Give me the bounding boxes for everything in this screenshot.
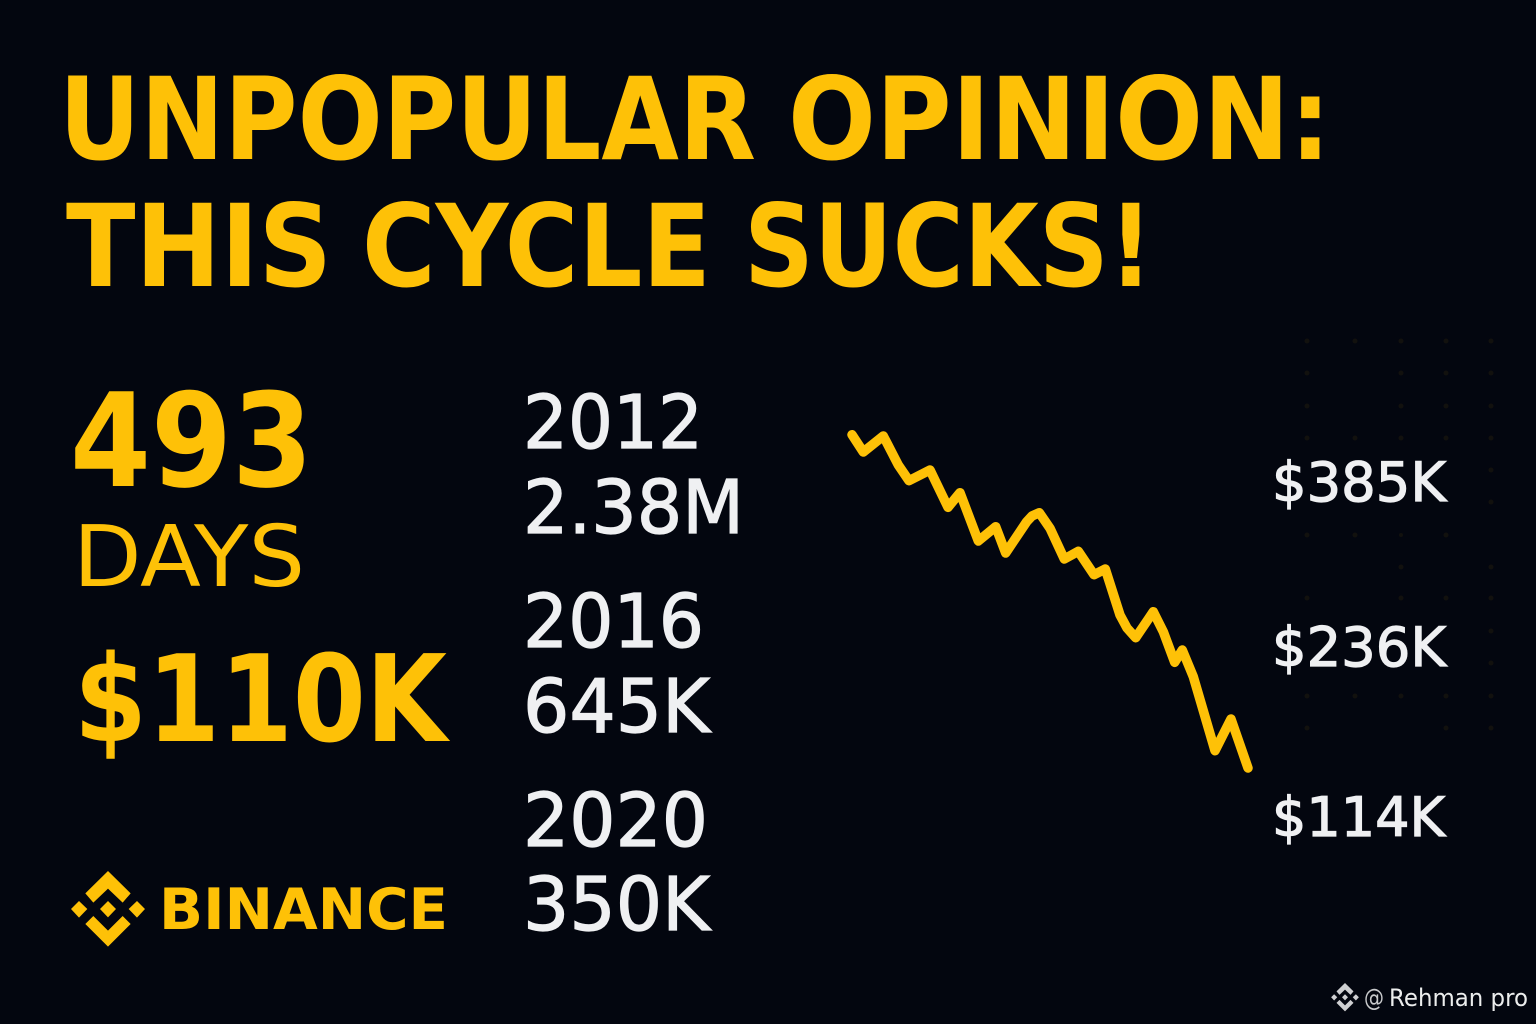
title: THIS xyxy=(66,180,332,313)
cycle list: 2012: 2.38M xyxy=(523,465,744,551)
title xyxy=(59,53,1331,313)
watermark: Rehman pro xyxy=(1389,984,1528,1012)
cycle list: 2016: 2016 xyxy=(523,579,704,665)
line chart: falling price xyxy=(852,435,1248,768)
cycle list: 2020 xyxy=(523,778,712,948)
watermark text: @ xyxy=(1364,984,1384,1012)
price label: $114K: $114K xyxy=(1272,786,1447,849)
title: OPINION: xyxy=(788,53,1331,186)
Binance logo xyxy=(71,871,448,947)
stat: $110K price: $110K xyxy=(74,631,450,770)
title: SUCKS! xyxy=(744,180,1153,313)
title: UNPOPULAR xyxy=(59,53,756,186)
Binance wordmark: BINANCE xyxy=(159,877,448,943)
title: CYCLE xyxy=(362,180,711,313)
icon: watermark diamond xyxy=(1331,983,1359,1011)
icon: Binance diamond xyxy=(71,871,145,947)
cycle list: 2012 xyxy=(523,380,744,551)
cycle list: 2016: 645K xyxy=(523,664,712,750)
watermark xyxy=(1331,983,1528,1012)
price label: $236K: $236K xyxy=(1272,616,1448,679)
price label: $385K: $385K xyxy=(1272,451,1448,514)
cycle list: 2012: 2012 xyxy=(523,380,703,466)
stat: 493 days xyxy=(70,365,313,607)
cycle list: 2020: 350K xyxy=(523,862,712,948)
stat: 493 days: 493 xyxy=(70,365,313,517)
stat: 493 days: DAYS xyxy=(73,508,305,607)
cycle list: 2020: 2020 xyxy=(523,778,708,864)
cycle list: 2016 xyxy=(523,579,712,750)
